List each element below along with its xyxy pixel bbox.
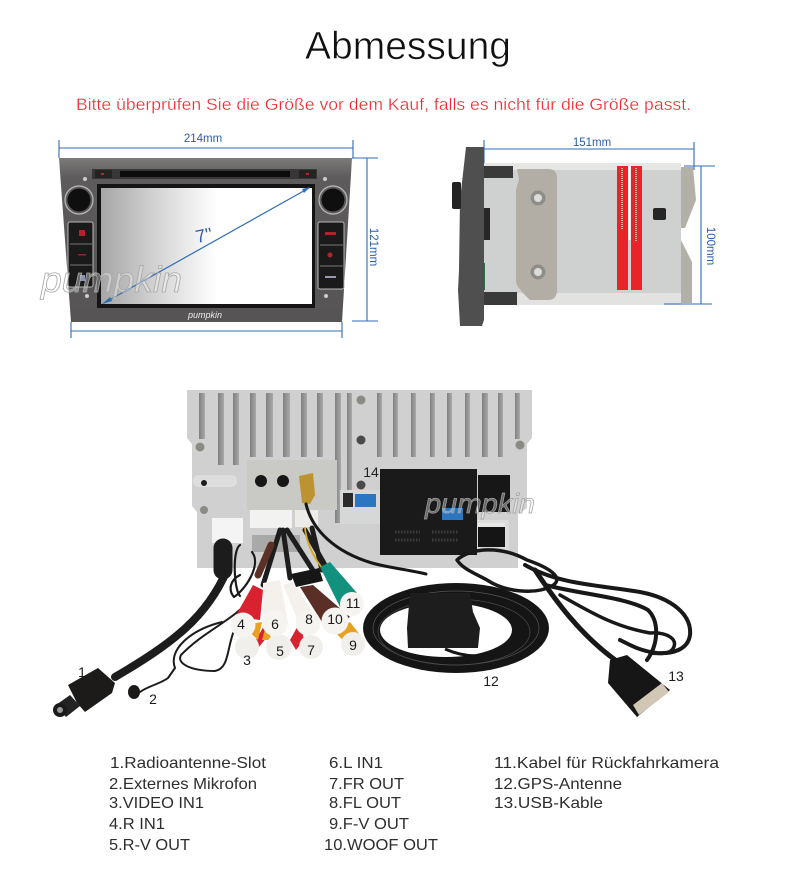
number labels: 8 [305, 611, 313, 627]
dimension: 214mm width [59, 133, 353, 158]
dimension: 151mm depth: 151mm [573, 137, 611, 149]
list column 2: 6.L IN1 [329, 755, 383, 772]
black adapter box [291, 568, 323, 587]
number labels: 2 [149, 691, 157, 707]
watermark: pumpkin [40, 259, 182, 300]
GPS antenna [407, 593, 480, 648]
parts list [109, 755, 719, 854]
number labels: 5 [276, 643, 284, 659]
GPS cable coil [363, 583, 549, 673]
number labels: 7 [307, 642, 315, 658]
warning text: Bitte überprüfen Sie die Größe vor dem Kauf, falls es nicht für die Größe passt. [76, 95, 691, 114]
cable bundle [115, 504, 690, 692]
side view of head unit with dimensions [452, 137, 716, 326]
list column 1: 1.Radioantenne-Slot [110, 755, 267, 772]
dimension: 100mm height: 100mm [704, 227, 716, 265]
number labels: 4 [237, 616, 245, 632]
heat sink back panel [187, 390, 532, 568]
list column 1: 4.R IN1 [109, 816, 165, 833]
screen diagonal 7 inch [102, 187, 310, 304]
list column 1: 2.Externes Mikrofon [109, 776, 257, 793]
front view of head unit with dimensions [40, 133, 379, 338]
USB socket [608, 655, 670, 717]
rear view with connectors [53, 390, 690, 717]
number labels: 12 [483, 673, 499, 689]
number labels: 6 [271, 616, 279, 632]
front panel [59, 158, 352, 322]
list column 2: 9.F-V OUT [329, 816, 409, 833]
microphone [128, 685, 140, 699]
list column 3: 12.GPS-Antenne [494, 776, 622, 793]
number labels: 11 [346, 595, 360, 611]
list column 1 [109, 755, 267, 854]
number labels: 1 [78, 664, 86, 680]
gold antenna connector [299, 473, 315, 504]
label 14: 14 [363, 464, 379, 480]
list column 3 [494, 755, 719, 812]
list column 2: 8.FL OUT [329, 795, 401, 812]
antenna plug [53, 668, 115, 717]
title: Abmessung [305, 25, 511, 68]
watermark: pumpkin [424, 488, 535, 519]
number labels: 13 [668, 668, 684, 684]
dimension: 121mm height: 121mm [367, 228, 379, 266]
front plate side [458, 147, 484, 326]
list column 3: 11.Kabel für Rückfahrkamera [494, 755, 719, 772]
black connector block [380, 469, 477, 555]
brand logo: pumpkin [187, 310, 222, 320]
number labels [78, 595, 684, 707]
chassis [482, 163, 696, 305]
RCA plugs [230, 562, 365, 660]
list column 2: 7.FR OUT [329, 776, 404, 793]
screen diagonal 7 inch: 7'' [194, 224, 214, 247]
list column 3: 13.USB-Kable [494, 795, 603, 812]
number labels: 9 [349, 637, 357, 653]
list column 2 [324, 755, 438, 854]
dimension: 151mm depth [484, 137, 694, 170]
number labels: 3 [243, 652, 251, 668]
list column 2: 10.WOOF OUT [324, 837, 438, 854]
list column 1: 3.VIDEO IN1 [109, 795, 204, 812]
dimension: 100mm height [664, 166, 716, 304]
dimension: 121mm height [71, 158, 379, 338]
list column 1: 5.R-V OUT [109, 837, 190, 854]
number labels: 10 [327, 611, 343, 627]
knob side [452, 182, 461, 209]
dimension: 214mm width: 214mm [184, 133, 222, 145]
